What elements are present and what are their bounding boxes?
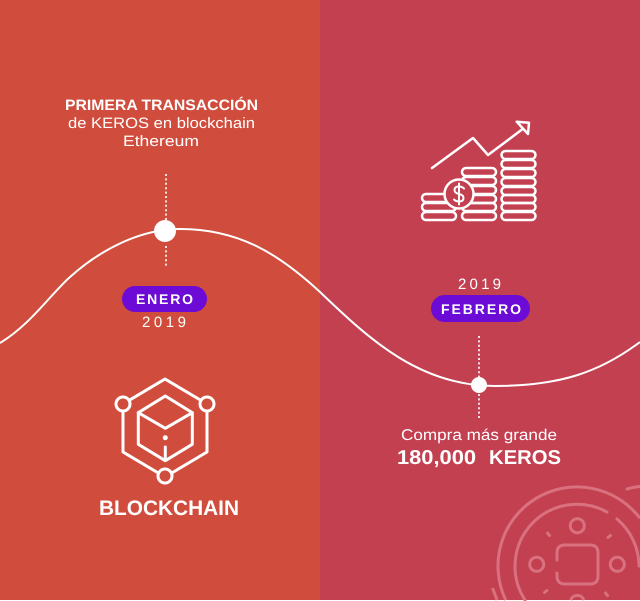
date badge: febrero: FEBRERO xyxy=(441,301,521,317)
decorative coin icon bottom right xyxy=(492,486,640,600)
date badge: enero: ENERO xyxy=(136,291,193,307)
date badge: febrero xyxy=(431,295,530,322)
text block: primera transacción: PRIMERA TRANSACCIÓN xyxy=(65,96,258,114)
text block: primera transacción xyxy=(65,96,258,150)
icon: coins and growth arrow xyxy=(422,122,536,220)
year: enero: 2019 xyxy=(142,314,186,331)
timeline curve xyxy=(0,229,640,386)
dotted connector: febrero xyxy=(478,336,480,418)
text block: compra más grande xyxy=(397,427,561,469)
text block: primera transacción: Ethereum xyxy=(123,133,199,150)
text block: primera transacción: de KEROS en blockchain xyxy=(68,115,255,132)
year: febrero: 2019 xyxy=(458,276,501,293)
panel: right background xyxy=(320,0,640,600)
timeline marker: enero xyxy=(154,220,176,242)
text block: compra más grande: Compra más grande xyxy=(401,427,557,444)
icon: blockchain hexagon cube xyxy=(116,379,214,483)
label: blockchain: BLOCKCHAIN xyxy=(99,497,239,520)
date badge: enero xyxy=(122,286,207,312)
timeline marker: febrero xyxy=(471,377,487,393)
text block: compra más grande: KEROS xyxy=(489,447,561,469)
dotted connector: enero xyxy=(165,174,167,266)
panel: left background xyxy=(0,0,320,600)
text block: compra más grande: 180,000 xyxy=(397,447,476,469)
